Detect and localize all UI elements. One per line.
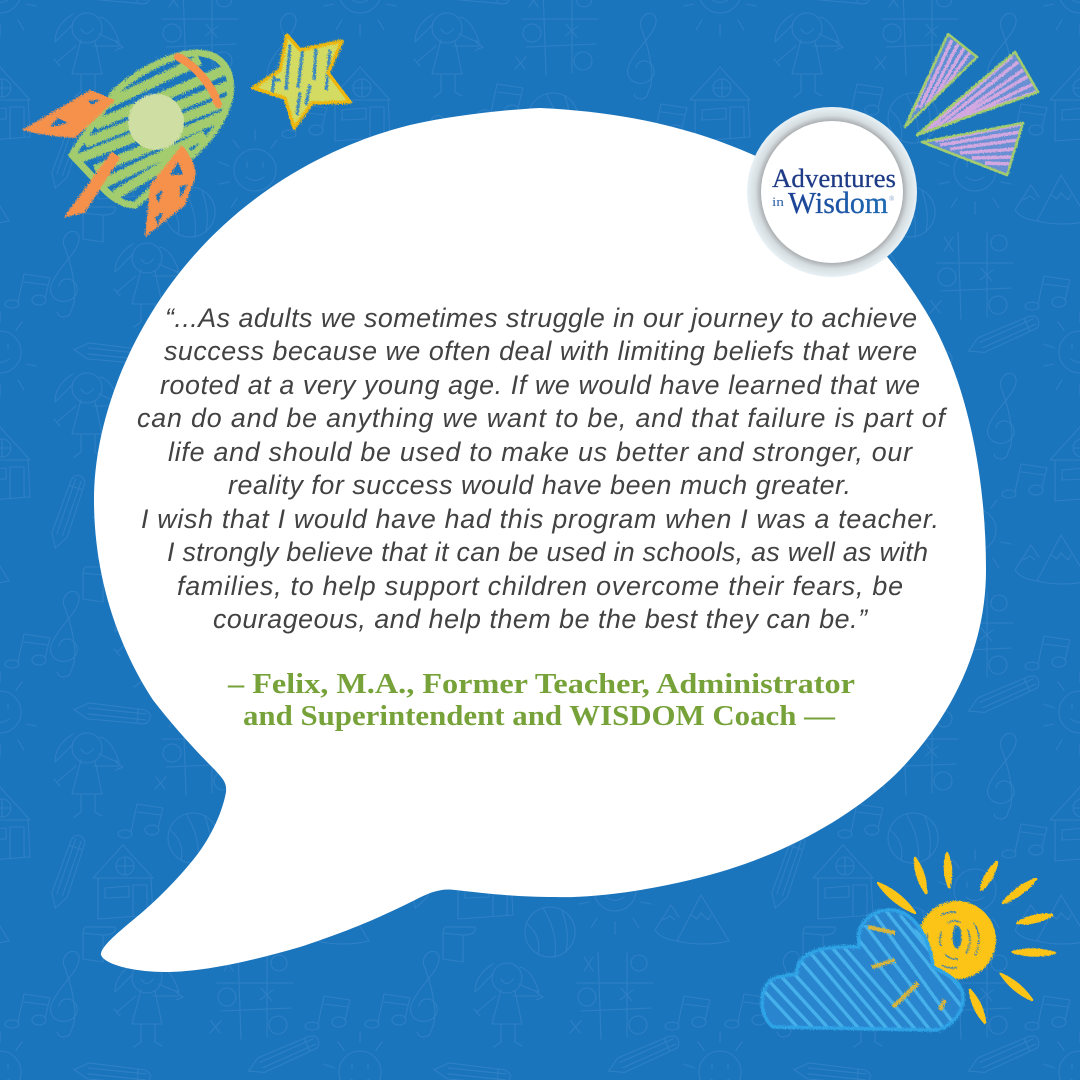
testimonial quote: courageous, and help them be the best they can be.” [213, 604, 868, 634]
testimonial quote: I wish that I would have had this program when I was a teacher. [141, 504, 939, 534]
testimonial quote: families, to help support children overcome their fears, be [177, 571, 903, 601]
logo badge [747, 107, 917, 277]
testimonial quote: I strongly believe that it can be used in schools, as well as with [167, 537, 928, 567]
speech bubble [94, 108, 986, 972]
attribution: and Superintendent and WISDOM Coach — [243, 700, 836, 732]
attribution [227, 668, 855, 732]
attribution: – Felix, M.A., Former Teacher, Administrator [227, 668, 855, 700]
logo wordmark [772, 164, 896, 220]
cloud [762, 910, 970, 1030]
sun disc [918, 901, 996, 979]
testimonial quote [137, 303, 948, 634]
icon: burst of three triangles [905, 34, 1038, 175]
logo wordmark: in [772, 194, 785, 209]
testimonial quote: can do and be anything we want to be, and that failure is part of [137, 403, 948, 433]
icon: sun and cloud [762, 853, 1055, 1030]
logo wordmark: ® [889, 195, 895, 203]
sun rays [878, 853, 1055, 1023]
icon: star [253, 35, 350, 128]
testimonial quote: rooted at a very young age. If we would have learned that we [160, 370, 920, 400]
logo wordmark: Adventures [772, 164, 896, 193]
logo wordmark: Wisdom [788, 185, 888, 220]
testimonial quote: reality for success would have been much greater. [228, 470, 851, 500]
testimonial quote: success because we often deal with limiting beliefs that were [164, 336, 917, 366]
icon: rocket [22, 53, 231, 237]
testimonial quote: “...As adults we sometimes struggle in our journey to achieve [165, 303, 917, 333]
testimonial quote: life and should be used to make us better and stronger, our [168, 437, 913, 467]
